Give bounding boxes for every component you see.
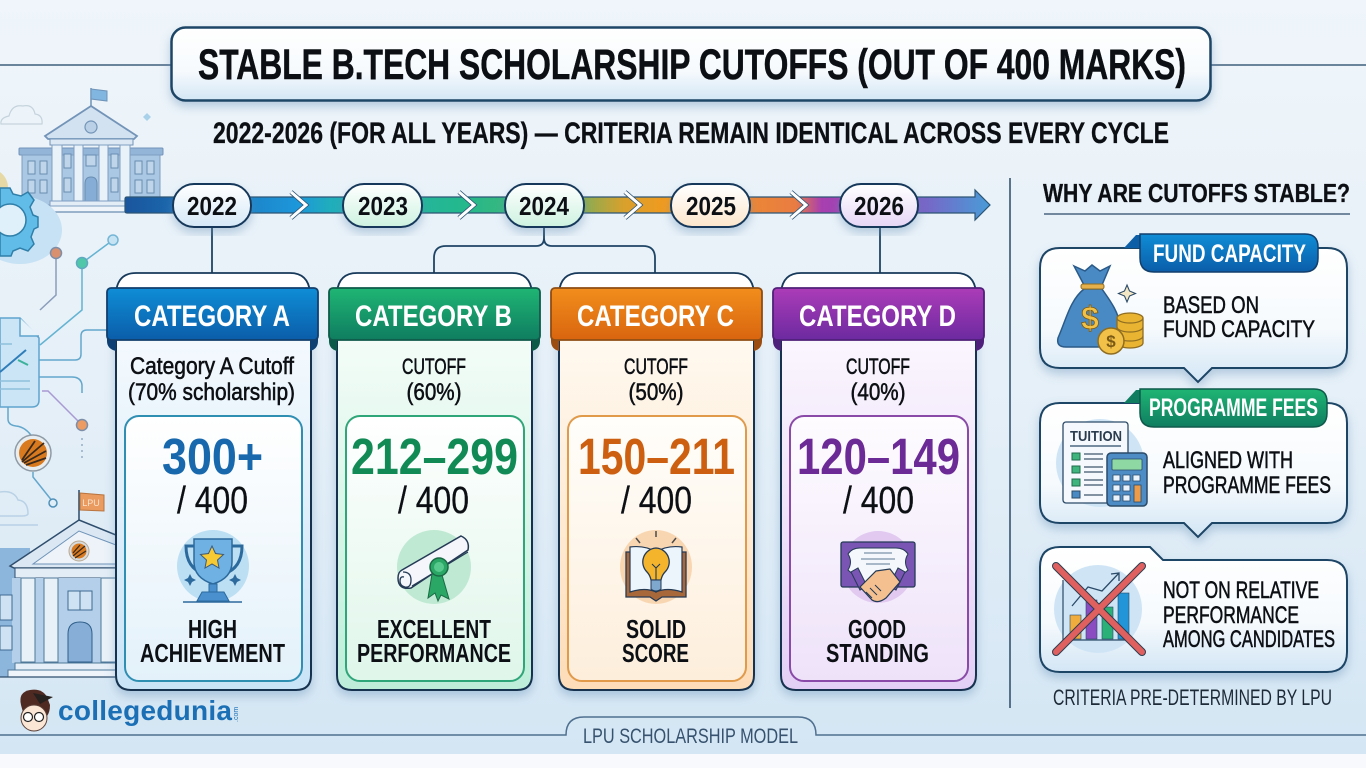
reason card: programme fees [1040,389,1347,537]
score box D: STANDING [826,638,929,668]
text: relative performance: PERFORMANCE [1163,602,1299,629]
cutoff label C [624,354,688,406]
icon: tuition calculator: TUITION [1070,428,1122,445]
icon: small cloud [0,492,38,525]
year pill 2023: 2023 [358,191,408,221]
cutoff label C: CUTOFF [624,354,688,379]
footer line and badge: LPU SCHOLARSHIP MODEL [583,725,798,748]
icon: money bag [1058,265,1143,354]
icon: cloud top [1,106,42,124]
text: programme fees [1163,447,1331,499]
score box B: 212–299 [351,428,518,485]
network nodes [49,235,118,507]
header: category C: CATEGORY C [577,300,734,333]
icon: LPU seal [15,435,51,471]
icon: gear [0,188,62,264]
header: category C [551,288,762,340]
text: programme fees: ALIGNED WITH [1163,447,1293,474]
year pill 2026 [840,184,918,227]
header: category B [329,288,540,340]
panel: category B [329,273,540,690]
header: category B: CATEGORY B [355,300,512,333]
score box C [568,416,746,681]
score box B [346,416,524,681]
header: category D [773,288,984,340]
panel: why stable [1040,178,1350,710]
cutoff label C: (50%) [628,379,684,406]
year pill 2024 [505,184,584,227]
footer line and badge [0,717,1366,748]
score box D: 120–149 [797,428,960,485]
icon: yellow blob behind gear [0,172,8,188]
cutoff label A: Category A Cutoff [130,353,294,380]
icon: main building [0,88,163,212]
header: category A: CATEGORY A [134,300,290,333]
logo: collegedunia: .com [233,707,240,722]
score box A: 300+ [162,428,263,485]
year pill 2025: 2025 [686,191,736,221]
score box B: PERFORMANCE [357,638,511,668]
icon: crossed-out chart [1054,565,1142,653]
tab: fund capacity [1140,234,1318,272]
year pill 2024: 2024 [519,191,569,221]
cutoff label A: (70% scholarship) [128,379,295,406]
text: relative performance [1163,577,1335,653]
icon: tuition calculator [1056,419,1147,507]
header: category A [107,288,318,340]
logo: collegedunia [20,690,240,731]
text: fund capacity [1163,292,1315,343]
score box A: HIGH [188,614,237,644]
icon: diamond [143,113,151,121]
header: category D: CATEGORY D [799,300,956,333]
score box C: 150–211 [578,428,735,485]
cutoff label D [846,354,910,406]
reason card: relative performance [1040,547,1347,672]
icon: document [0,318,39,407]
text: fund capacity: FUND CAPACITY [1163,316,1315,343]
icon: diploma [397,530,471,604]
title box [172,28,1210,100]
year pill 2022: 2022 [187,191,237,221]
cutoff label B [402,354,466,406]
icon: student mascot [20,690,53,731]
icon: money bag: $ [1106,332,1116,351]
illustration: left campus and network [0,88,163,677]
panel: category C [551,273,762,690]
timeline arrow [125,190,990,220]
icon: money bag: $ [1081,300,1099,336]
cutoff label B: (60%) [406,379,462,406]
cutoff label B: CUTOFF [402,354,466,379]
year pill 2022 [173,184,251,227]
score box C: SCORE [622,638,689,668]
panel: category D [773,273,984,690]
icon: LPU building [0,490,116,677]
cutoff label D: (40%) [850,379,906,406]
year pill 2026: 2026 [854,191,904,221]
icon: LPU building: LPU [82,498,100,508]
divider [1009,178,1011,708]
score box A: / 400 [177,480,248,522]
score box B: / 400 [398,480,469,522]
icon: handshake certificate [841,531,915,603]
score box A [125,416,302,681]
tab: programme fees [1140,389,1327,427]
year pill 2025 [671,184,750,227]
connector lines [212,227,880,273]
tab: fund capacity: FUND CAPACITY [1153,240,1306,268]
cutoff label A [128,353,295,406]
score box D: GOOD [848,614,906,644]
icon: trophy [177,530,249,602]
score box A: ACHIEVEMENT [140,638,285,668]
icon: book and bulb [620,530,692,604]
score box D [790,416,968,681]
reason card: fund capacity [1040,234,1347,382]
score box D: / 400 [843,480,914,522]
score box C: SOLID [626,614,686,644]
score box B: EXCELLENT [377,614,491,644]
cutoff label D: CUTOFF [846,354,910,379]
score box C: / 400 [621,480,692,522]
arrow chevrons [291,192,806,218]
logo: collegedunia: collegedunia [58,695,232,726]
panel: category A [107,273,318,690]
network lines [8,240,117,502]
text: fund capacity: BASED ON [1163,292,1259,319]
year pill 2023 [343,184,422,227]
